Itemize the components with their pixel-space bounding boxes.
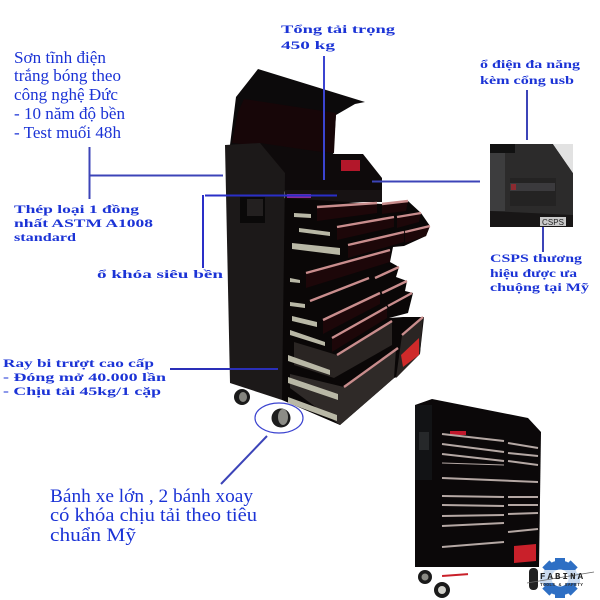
rear wheel [234, 389, 250, 405]
leader line: rails [170, 368, 278, 370]
text: paint: công nghệ Đức [14, 85, 118, 104]
side panel [225, 143, 285, 400]
text: paint: Sơn tĩnh điện [14, 48, 106, 67]
open lid [230, 69, 365, 155]
text: wheels: có khóa chịu tải theo tiêu [50, 506, 257, 526]
drawer fronts [306, 201, 430, 352]
text: steel: Thép loại 1 đồng [14, 202, 139, 216]
text: steel: standard [14, 230, 76, 244]
text: load capacity: 450 kg [281, 38, 335, 52]
logo: Fabina Tools & Safety: TOOLS & SAFETY [540, 582, 583, 588]
text: steel: nhất ASTM A1008 [14, 216, 153, 230]
text: paint: trắng bóng theo [14, 66, 121, 85]
logo: Fabina Tools & Safety: FABINA [540, 572, 584, 582]
text: outlet: kèm cổng usb [480, 73, 574, 87]
top chest [260, 143, 382, 202]
main tool cabinet [225, 69, 430, 428]
leader line: outlet label [526, 90, 528, 140]
leader line: load capacity [323, 56, 325, 180]
text: paint: - 10 năm độ bền [14, 104, 125, 123]
front swivel wheel [272, 408, 290, 428]
leader line: lock [203, 195, 337, 268]
drawer rails [288, 213, 340, 421]
wheel highlight ellipse [255, 403, 303, 433]
leader line: paint and steel [89, 147, 223, 199]
text: wheels: Bánh xe lớn , 2 bánh xoay [50, 487, 254, 507]
inset photo: power outlet [490, 144, 573, 227]
large bottom drawer [287, 321, 396, 425]
cabinet wheels [418, 570, 432, 584]
leader line: outlet to cabinet [372, 180, 480, 182]
text: paint: - Test muối 48h [14, 123, 122, 142]
text: outlet: ổ điện đa năng [480, 57, 580, 71]
drawer handles [306, 201, 430, 387]
text: CSPS brand: CSPS thương [490, 251, 582, 265]
text: rails: Ray bi trượt cao cấp [3, 356, 154, 370]
leader line: wheel [221, 436, 267, 484]
text: rails: - Đóng mở 40.000 lần [3, 370, 166, 384]
secondary cabinet photo [415, 399, 541, 598]
text: rails: - Chịu tải 45kg/1 cặp [3, 384, 161, 398]
side drawer with red label [396, 317, 423, 378]
text: lock: ổ khóa siêu bền [97, 267, 224, 281]
drawer stack body [282, 198, 430, 425]
text: CSPS brand: chuộng tại Mỹ [490, 280, 589, 294]
cabinet handles [442, 434, 538, 547]
text: load capacity: Tổng tải trọng [281, 22, 395, 36]
text: CSPS brand: hiệu được ưa [490, 266, 577, 280]
logo: Fabina Tools & Safety [527, 558, 594, 598]
text: wheels: chuẩn Mỹ [50, 526, 137, 546]
leader line: CSPS label [542, 227, 544, 252]
inset photo: power outlet: CSPS [542, 218, 564, 227]
